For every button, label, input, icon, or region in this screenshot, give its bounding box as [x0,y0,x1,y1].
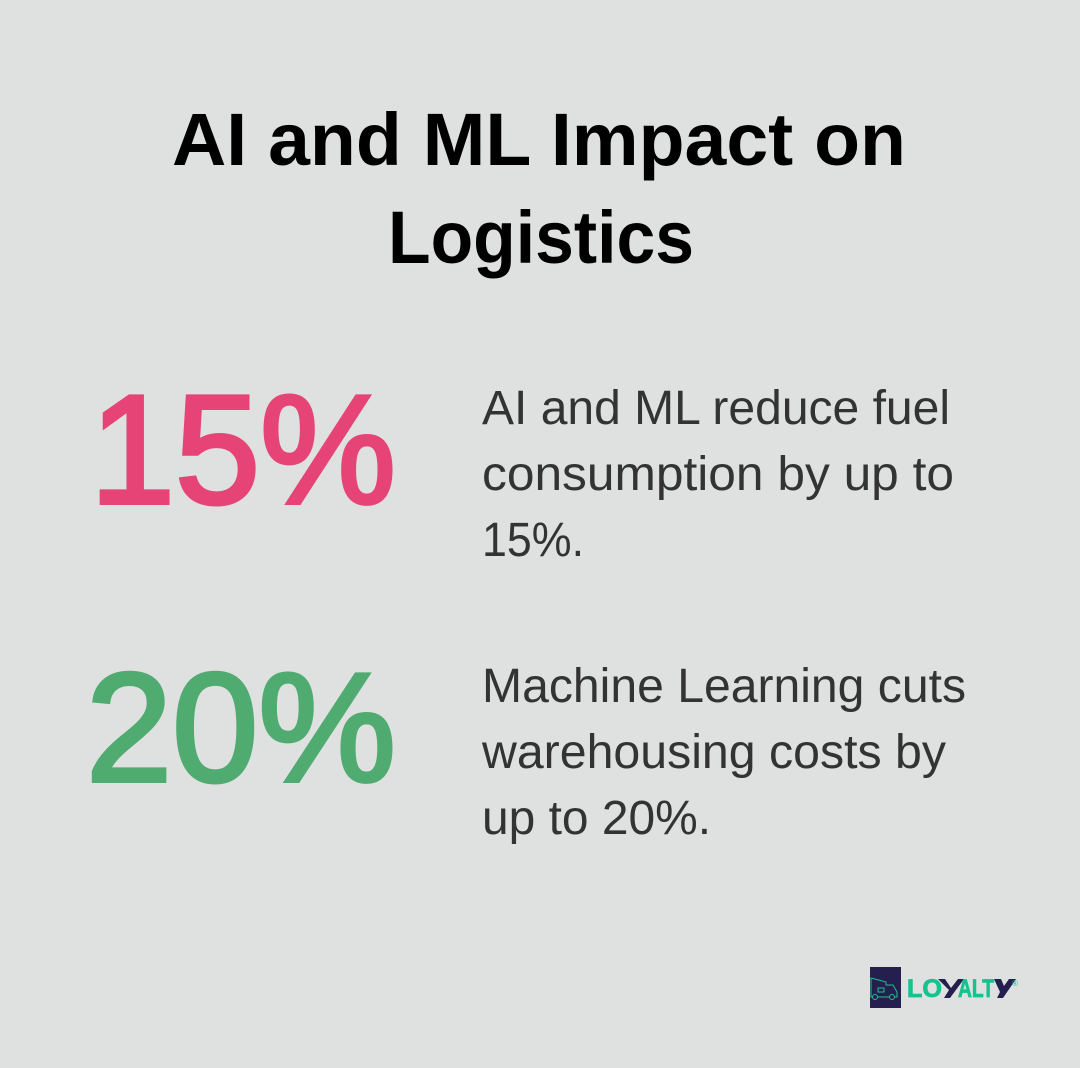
description: fuel consumption: AI and ML reduce fuel [482,382,950,435]
description: fuel consumption [482,382,954,567]
description: warehousing costs: Machine Learning cuts [482,660,966,713]
wordmark: ALT [958,975,994,1003]
description: warehousing costs [481,660,966,845]
description: fuel consumption: 15%. [482,514,584,567]
title [172,98,906,279]
wordmark: LO [907,975,942,1003]
title: AI and ML Impact on [172,98,906,181]
logo: Loyalty [870,967,1018,1008]
stat: 15%: 15% [90,363,396,536]
description: warehousing costs: up to 20%. [482,792,711,845]
wordmark: ® [1012,979,1018,988]
wordmark [907,975,1018,1003]
stat: 20%: 20% [86,641,396,814]
icon: truck badge [870,967,901,1008]
title: Logistics [388,196,694,279]
description: warehousing costs: warehousing costs by [481,726,946,779]
description: fuel consumption: consumption by up to [482,448,954,501]
